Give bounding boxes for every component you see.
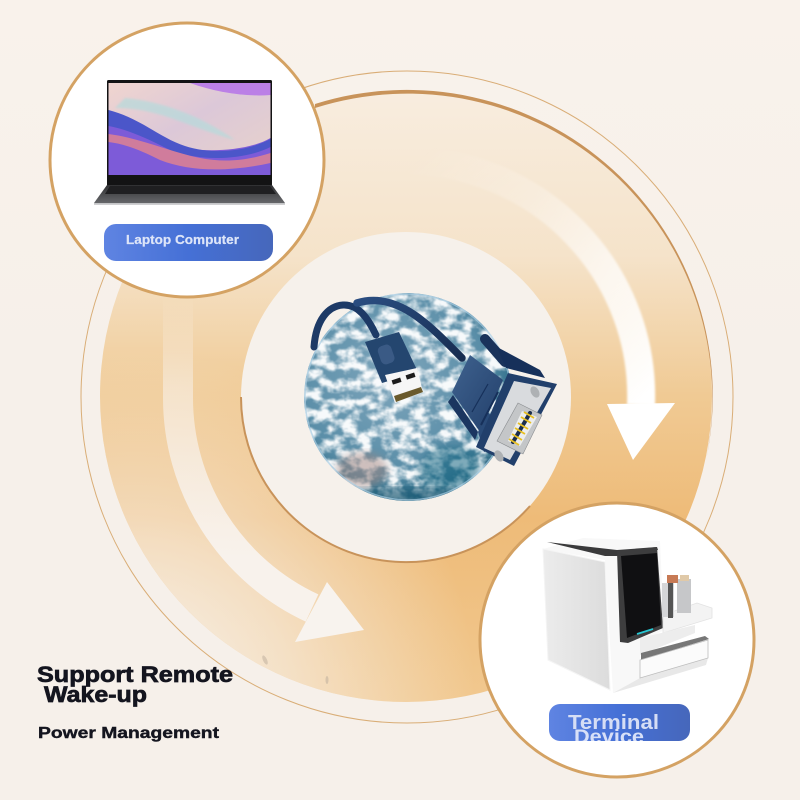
label: terminal device: Terminal bbox=[568, 712, 659, 734]
panel: terminal device bbox=[480, 503, 754, 777]
heading: support remote wake-up: Support Remote bbox=[37, 662, 233, 687]
icon: terminal device bbox=[543, 538, 712, 693]
panel: laptop bbox=[50, 23, 324, 297]
icon: earth bbox=[304, 293, 512, 506]
arrow: clockwise lower left bbox=[178, 296, 364, 642]
heading: support remote wake-up: Wake-up bbox=[44, 682, 147, 707]
panel circle bbox=[480, 503, 754, 777]
heading: support remote wake-up bbox=[37, 662, 233, 707]
subheading: power management: Power Management bbox=[38, 725, 219, 742]
panel circle bbox=[50, 23, 324, 297]
ring highlight arc bbox=[315, 90, 713, 460]
large gradient ring bbox=[100, 90, 712, 702]
label: laptop computer: Laptop Computer bbox=[126, 233, 239, 247]
inner circle bbox=[241, 232, 571, 562]
label: laptop computer bbox=[104, 224, 273, 261]
label: terminal device: Device bbox=[574, 727, 644, 748]
arrow: clockwise right bbox=[406, 161, 675, 460]
specks bbox=[261, 655, 328, 684]
icon: USB plug bbox=[365, 332, 423, 403]
icon: cables bbox=[314, 300, 462, 358]
icon: laptop bbox=[94, 80, 285, 205]
central globe with cable bbox=[304, 293, 557, 506]
icon: serial connector bbox=[448, 339, 557, 466]
label: terminal device bbox=[549, 704, 690, 741]
outer thin ring bbox=[81, 71, 733, 723]
